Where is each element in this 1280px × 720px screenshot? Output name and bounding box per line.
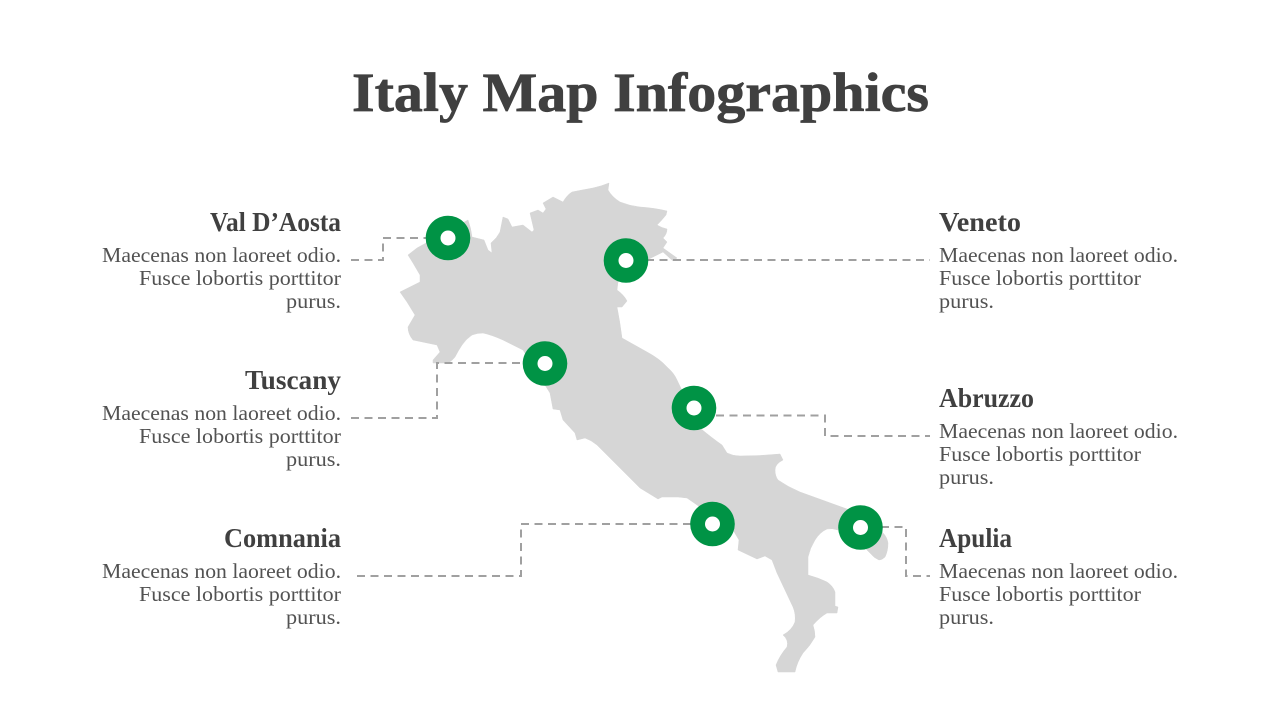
connector: Tuscany — [351, 363, 526, 418]
text block: Apulia — [939, 523, 1178, 629]
text block: Veneto — [939, 207, 1178, 313]
connector: Comnania — [357, 524, 694, 576]
map of Italy — [400, 183, 888, 672]
connector: Veneto — [646, 259, 930, 261]
text block: Tuscany — [102, 365, 341, 471]
text block: Comnania — [102, 523, 341, 629]
text block: Apulia: Maecenas non laoreet odio. — [939, 559, 1178, 583]
text block: Tuscany: Tuscany — [245, 365, 341, 395]
text block: Abruzzo: Abruzzo — [939, 383, 1034, 413]
text block: Veneto: Veneto — [939, 207, 1021, 237]
text block: Val D'Aosta — [102, 207, 341, 313]
pin: Comnania — [690, 502, 735, 546]
text block: Abruzzo — [939, 383, 1178, 489]
text block: Veneto: Maecenas non laoreet odio. — [939, 243, 1178, 267]
text block: Tuscany: Fusce lobortis porttitor — [139, 424, 341, 448]
connector: Apulia — [881, 527, 930, 576]
pin: Tuscany — [523, 341, 567, 386]
pin: Abruzzo — [672, 386, 716, 430]
pin: Val D'Aosta — [426, 216, 470, 260]
text block: Abruzzo: Fusce lobortis porttitor — [939, 442, 1141, 466]
text block: Val D'Aosta: Val D’Aosta — [210, 207, 341, 237]
text block: Comnania: purus. — [286, 605, 341, 629]
pin: Apulia — [838, 505, 883, 550]
text block: Veneto: purus. — [939, 289, 994, 313]
text block: Tuscany: purus. — [286, 447, 341, 471]
title: Italy Map Infographics — [352, 62, 929, 123]
text block: Abruzzo: Maecenas non laoreet odio. — [939, 419, 1178, 443]
text block: Comnania: Fusce lobortis porttitor — [139, 582, 341, 606]
text block: Veneto: Fusce lobortis porttitor — [939, 266, 1141, 290]
text block: Abruzzo: purus. — [939, 465, 994, 489]
text block: Val D'Aosta: purus. — [286, 289, 341, 313]
connector: Abruzzo — [716, 416, 930, 436]
text block: Tuscany: Maecenas non laoreet odio. — [102, 401, 341, 425]
text block: Val D'Aosta: Fusce lobortis porttitor — [139, 266, 341, 290]
text block: Comnania: Comnania — [224, 523, 341, 553]
text block: Apulia: purus. — [939, 605, 994, 629]
text block: Apulia: Apulia — [939, 523, 1012, 553]
pin: Veneto — [604, 238, 648, 283]
text block: Apulia: Fusce lobortis porttitor — [939, 582, 1141, 606]
connector: Val D'Aosta — [351, 238, 428, 260]
text block: Comnania: Maecenas non laoreet odio. — [102, 559, 341, 583]
text block: Val D'Aosta: Maecenas non laoreet odio. — [102, 243, 341, 267]
